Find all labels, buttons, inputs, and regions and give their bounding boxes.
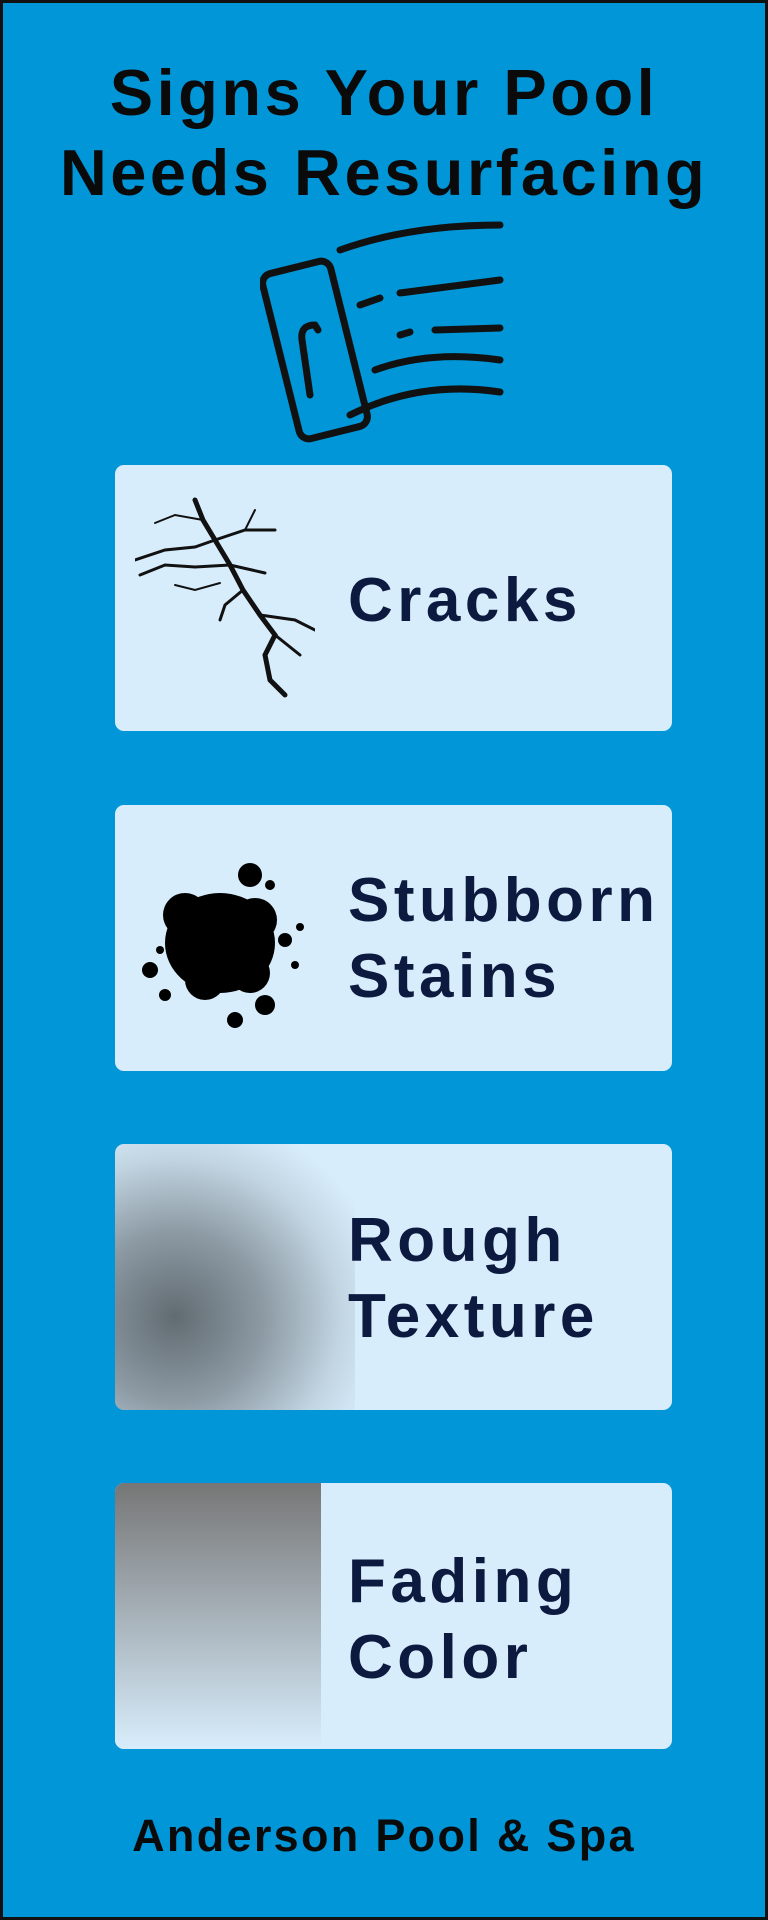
icon: trowel	[260, 222, 504, 442]
label: Cracks	[348, 566, 582, 635]
panel: cracks	[115, 465, 672, 731]
panel: texture	[115, 1144, 672, 1410]
label: Texture	[348, 1282, 599, 1351]
icon: splat	[142, 863, 304, 1028]
label: Color	[348, 1623, 532, 1692]
footer: Anderson Pool & Spa	[132, 1810, 636, 1861]
icon: rough texture	[115, 1144, 355, 1410]
label: Fading	[348, 1547, 578, 1616]
label: Stubborn	[348, 866, 660, 935]
label: Stains	[348, 942, 561, 1011]
title: Needs Resurfacing	[60, 136, 708, 209]
panel: stains	[115, 805, 672, 1071]
label: Rough	[348, 1206, 567, 1275]
panel: fading	[115, 1483, 672, 1749]
title: Signs Your Pool	[110, 56, 658, 129]
title	[60, 56, 708, 209]
icon: crack	[135, 498, 315, 698]
icon: fading gradient	[115, 1483, 321, 1749]
label	[348, 1206, 599, 1351]
label	[348, 1547, 578, 1692]
label	[348, 866, 660, 1011]
